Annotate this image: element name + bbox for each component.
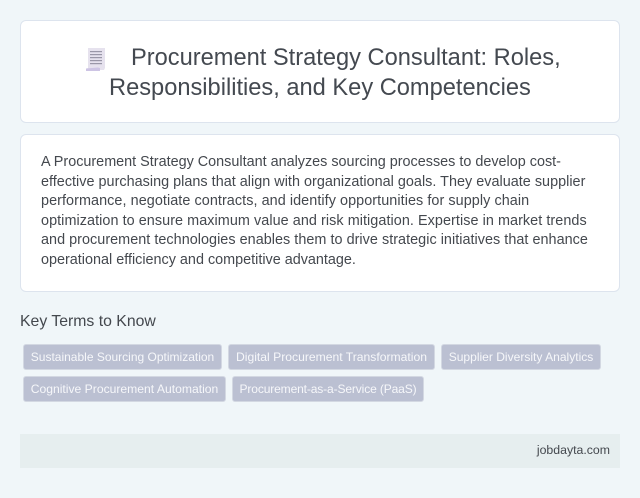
title panel (20, 20, 620, 123)
tag: supplier diversity: Supplier Diversity Analytics (449, 350, 593, 364)
footer bar (20, 434, 620, 468)
heading: key terms: Key Terms to Know (20, 313, 156, 330)
tag: sustainable sourcing: Sustainable Sourcing Optimization (31, 350, 214, 364)
tag: procurement as a service: Procurement-as-a-Service (PaaS) (240, 382, 416, 396)
tag: digital procurement: Digital Procurement Transformation (236, 350, 427, 364)
title heading (109, 45, 561, 101)
tag: digital procurement (228, 344, 435, 370)
tag: sustainable sourcing (23, 344, 222, 370)
description text: effective purchasing plans that align with organizational goals. They evaluate supplier (41, 174, 585, 190)
icon: document scroll (86, 48, 105, 71)
description text: operational efficiency and competitive advantage. (41, 252, 356, 268)
title heading: Procurement Strategy Consultant: Roles, (131, 45, 561, 71)
description text: performance, negotiate contracts, and identify opportunities for supply chain (41, 193, 529, 209)
description text: and procurement technologies enables them to drive strategic initiatives that enhance (41, 232, 588, 248)
description text: optimization to ensure maximum value and risk mitigation. Expertise in market trends (41, 213, 587, 229)
description text (41, 154, 588, 268)
key term tags (23, 344, 601, 402)
panel: description (20, 134, 620, 292)
tag: supplier diversity (441, 344, 601, 370)
tag: cognitive procurement (23, 376, 226, 402)
title heading: Responsibilities, and Key Competencies (109, 75, 531, 101)
description text: A Procurement Strategy Consultant analyzes sourcing processes to develop cost- (41, 154, 561, 170)
footer source: jobdayta.com (537, 443, 610, 457)
tag: cognitive procurement: Cognitive Procurement Automation (31, 382, 218, 396)
tag: procurement as a service (232, 376, 424, 402)
